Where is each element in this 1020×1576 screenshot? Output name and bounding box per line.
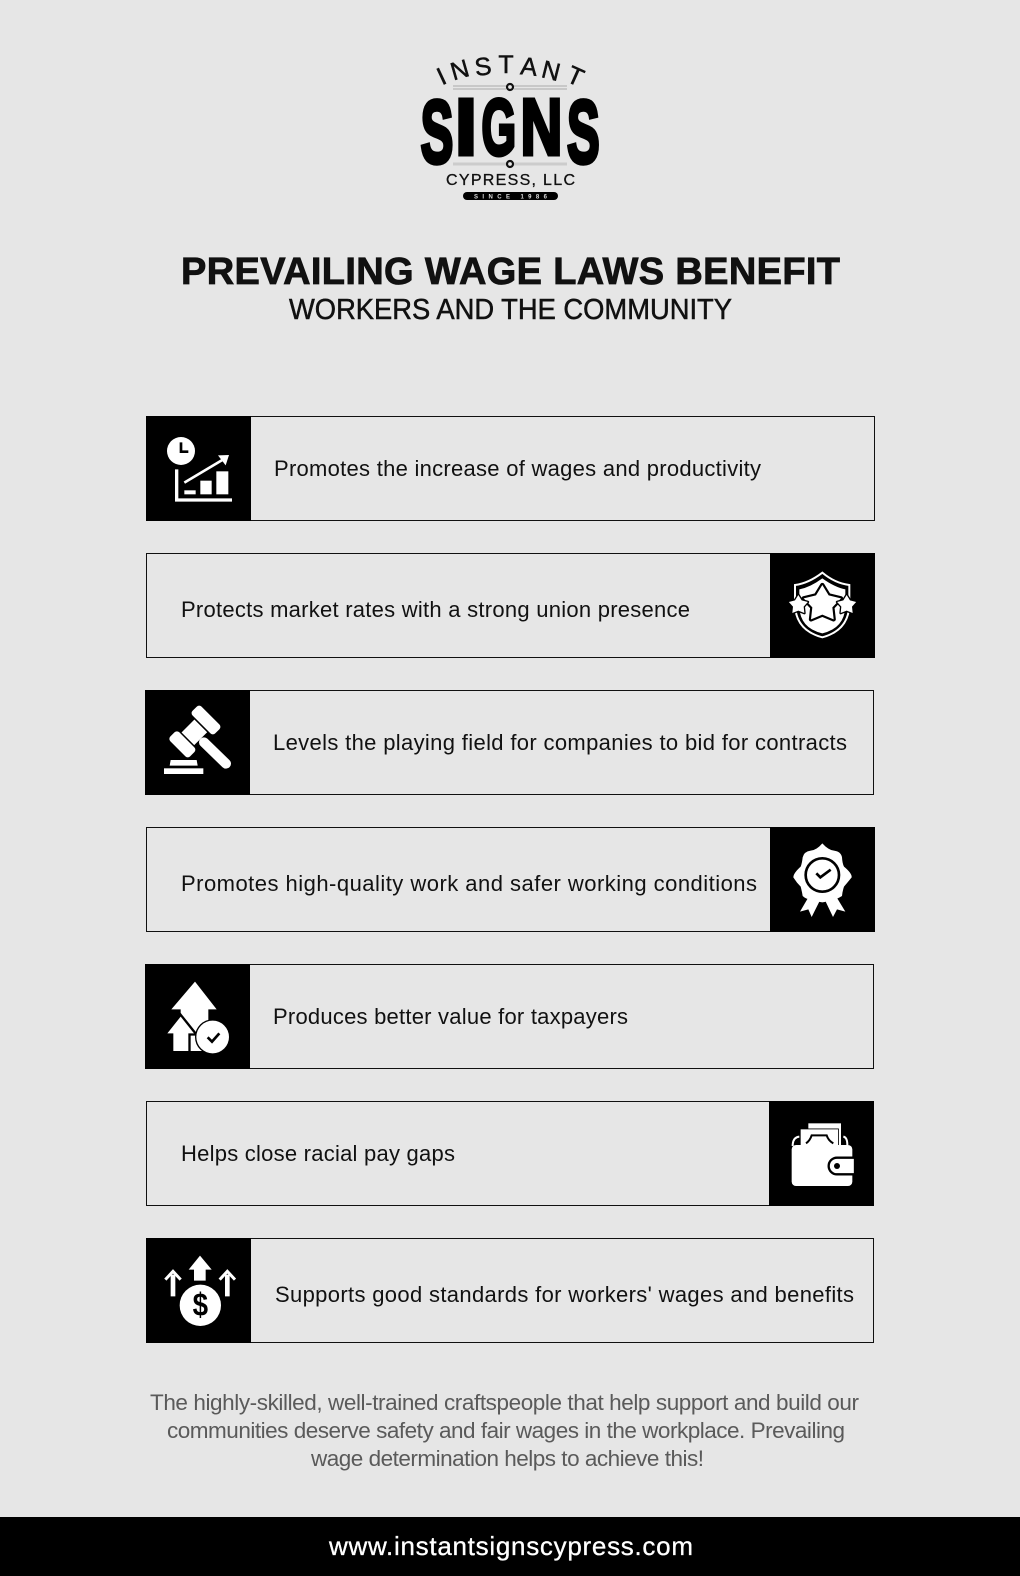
logo word: INSTANT: I bbox=[433, 63, 451, 91]
text: Supports good standards for workers' wages and benefits bbox=[275, 1282, 854, 1307]
closing paragraph: communities deserve safety and fair wages in the workplace. Prevailing bbox=[167, 1418, 845, 1443]
closing paragraph bbox=[150, 1390, 860, 1471]
logo rule and ring, upper bbox=[453, 84, 567, 90]
icon: dollar coin with arrows bbox=[165, 1256, 235, 1326]
logo: Instant Signs Cypress bbox=[421, 51, 600, 200]
panel: market rates bbox=[146, 553, 875, 658]
logo word: SIGNS: I bbox=[455, 82, 477, 172]
logo word: INSTANT: A bbox=[519, 52, 539, 82]
panel: standards for wages and benefits bbox=[146, 1238, 874, 1343]
icon: award badge bbox=[793, 843, 852, 917]
text: Helps close racial pay gaps bbox=[181, 1141, 455, 1166]
logo word: INSTANT: S bbox=[473, 52, 493, 82]
icon: clock and rising chart bbox=[167, 437, 232, 500]
logo pill: since bbox=[463, 192, 558, 200]
footer bar bbox=[0, 1517, 1020, 1576]
logo text: Cypress, LLC: CYPRESS, LLC bbox=[446, 172, 575, 189]
panel: racial pay gaps bbox=[146, 1101, 874, 1206]
logo word: INSTANT: T bbox=[563, 61, 588, 93]
logo word: SIGNS: S bbox=[421, 83, 453, 182]
subtitle: WORKERS AND THE COMMUNITY bbox=[289, 294, 732, 326]
panel: value for taxpayers bbox=[145, 964, 874, 1069]
logo rule and ring, lower bbox=[453, 161, 567, 167]
panel: wages and productivity bbox=[146, 416, 874, 521]
logo word: SIGNS: S bbox=[567, 83, 600, 182]
text: Promotes the increase of wages and productivity bbox=[274, 456, 761, 481]
text: Levels the playing field for companies to bid for contracts bbox=[273, 730, 847, 755]
logo word: INSTANT bbox=[433, 51, 588, 93]
logo word: INSTANT: N bbox=[447, 54, 472, 86]
footer website: www.instantsignscypress.com bbox=[328, 1531, 693, 1561]
logo word: INSTANT: N bbox=[539, 55, 563, 87]
panel: level playing field bbox=[145, 690, 874, 795]
logo word: INSTANT: T bbox=[498, 51, 514, 79]
panel: quality and safety bbox=[146, 827, 875, 932]
logo word: SIGNS: N bbox=[520, 82, 562, 172]
logo word: SIGNS bbox=[421, 82, 600, 182]
icon: dollar coin with arrows: $ bbox=[193, 1288, 208, 1323]
icon: shield with stars bbox=[789, 573, 856, 637]
text: Protects market rates with a strong union presence bbox=[181, 597, 690, 622]
closing paragraph: wage determination helps to achieve this! bbox=[310, 1446, 704, 1471]
text: Promotes high-quality work and safer working conditions bbox=[181, 871, 757, 896]
logo word: SIGNS: G bbox=[482, 82, 516, 172]
icon: gavel bbox=[164, 704, 226, 774]
closing paragraph: The highly-skilled, well-trained craftspeople that help support and build our bbox=[150, 1390, 860, 1415]
icon: wallet with cash bbox=[792, 1123, 858, 1186]
title: PREVAILING WAGE LAWS BENEFIT bbox=[181, 251, 840, 293]
icon: arrows with check bbox=[167, 982, 229, 1055]
text: Produces better value for taxpayers bbox=[273, 1004, 628, 1029]
logo pill: since: SINCE 1986 bbox=[474, 194, 548, 200]
